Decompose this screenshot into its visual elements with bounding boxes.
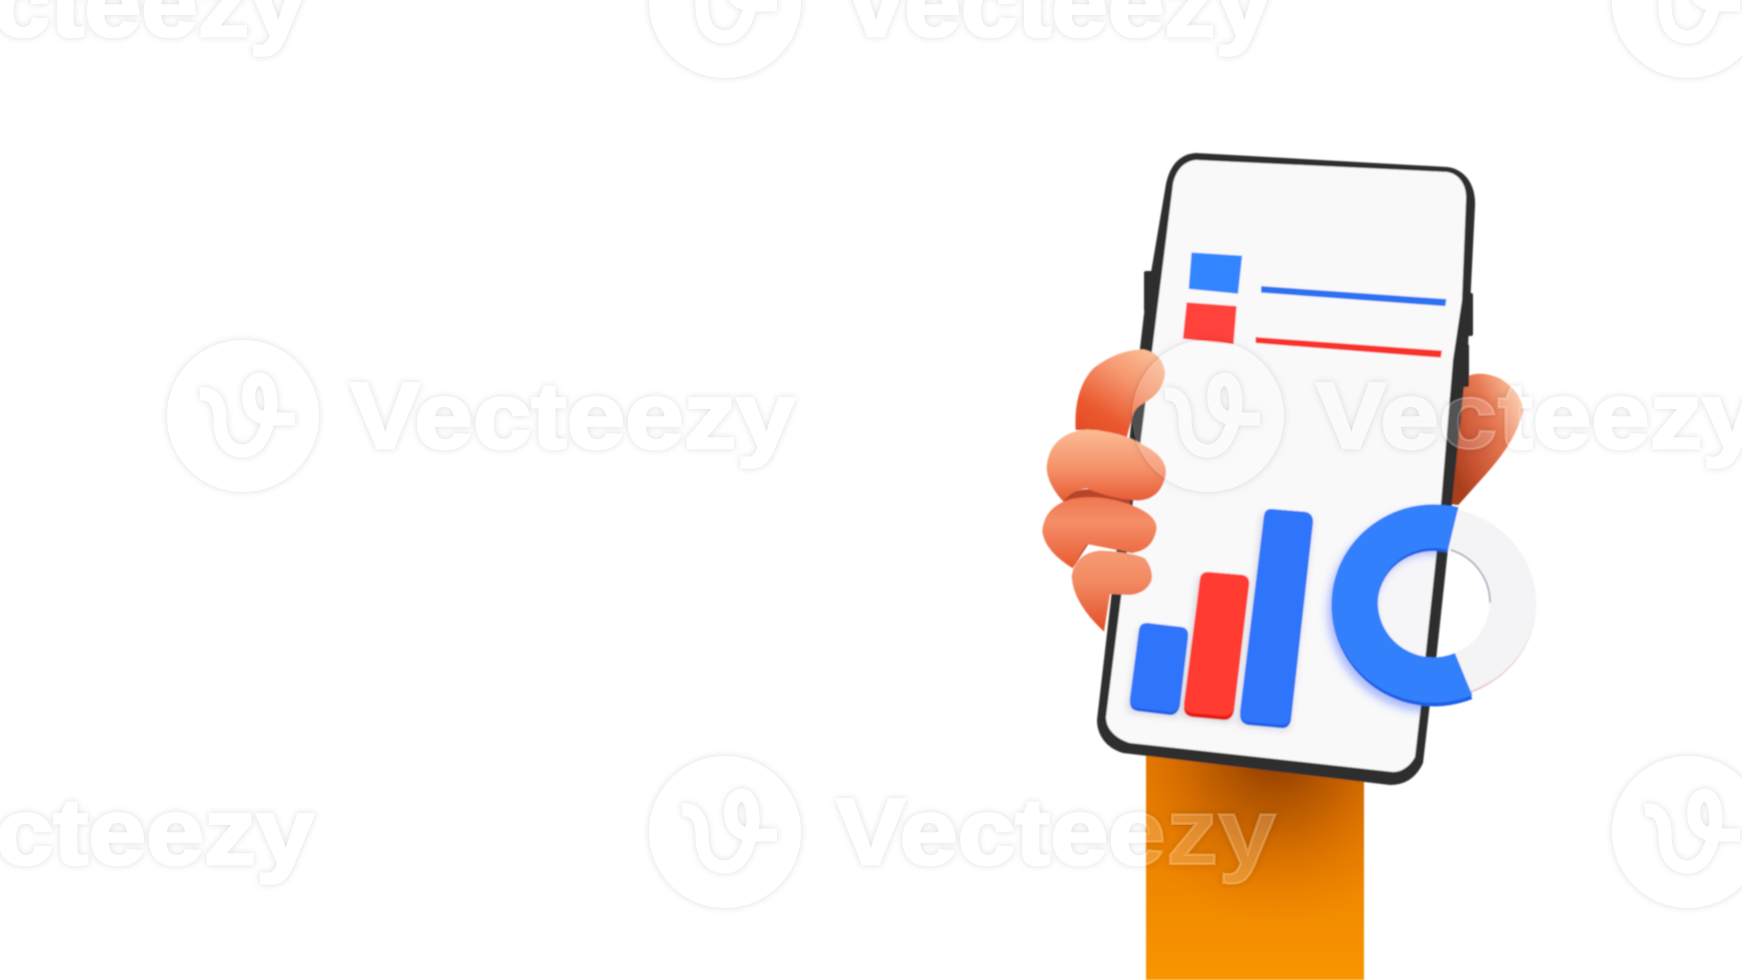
watermark logo: phone — [1132, 340, 1284, 492]
bar: medium red — [1184, 572, 1249, 720]
legend — [1183, 253, 1446, 358]
legend: blue item — [1189, 253, 1446, 306]
watermark text: bottom centre: Vecteezy — [836, 779, 1276, 884]
watermark text: right: Vecteezy — [1316, 363, 1742, 468]
donut shadow on screen — [1322, 508, 1438, 718]
watermark logo: top right — [1612, 0, 1742, 78]
left fingers — [1042, 349, 1166, 632]
side buttons — [1144, 271, 1473, 387]
phone — [1097, 153, 1475, 785]
index finger — [1047, 429, 1166, 502]
watermark logo: top centre — [649, 0, 801, 78]
legend: red item — [1183, 302, 1442, 358]
phone screen — [1106, 160, 1466, 772]
watermark text: left: Vecteezy — [350, 363, 795, 468]
watermark logo: bottom right — [1612, 756, 1742, 908]
donut: white segment — [1332, 507, 1536, 699]
orange sleeve — [1146, 745, 1364, 980]
bar: short blue — [1130, 623, 1188, 715]
hand and phone artwork — [1042, 153, 1536, 980]
bar shadows — [1128, 514, 1312, 730]
thumb — [1075, 349, 1165, 438]
watermark logo: bottom centre — [649, 756, 801, 908]
phone edge seen through donut hole — [1424, 550, 1449, 659]
bar chart — [1128, 509, 1313, 730]
bar: tall blue — [1240, 509, 1313, 728]
finger gaps shading — [1063, 489, 1133, 568]
middle finger — [1042, 497, 1157, 568]
phone body — [1097, 153, 1475, 785]
watermark logo: left — [167, 340, 319, 492]
little finger — [1072, 551, 1152, 632]
donut: blue segment — [1332, 504, 1472, 706]
right fingertip behind phone — [1443, 374, 1523, 505]
